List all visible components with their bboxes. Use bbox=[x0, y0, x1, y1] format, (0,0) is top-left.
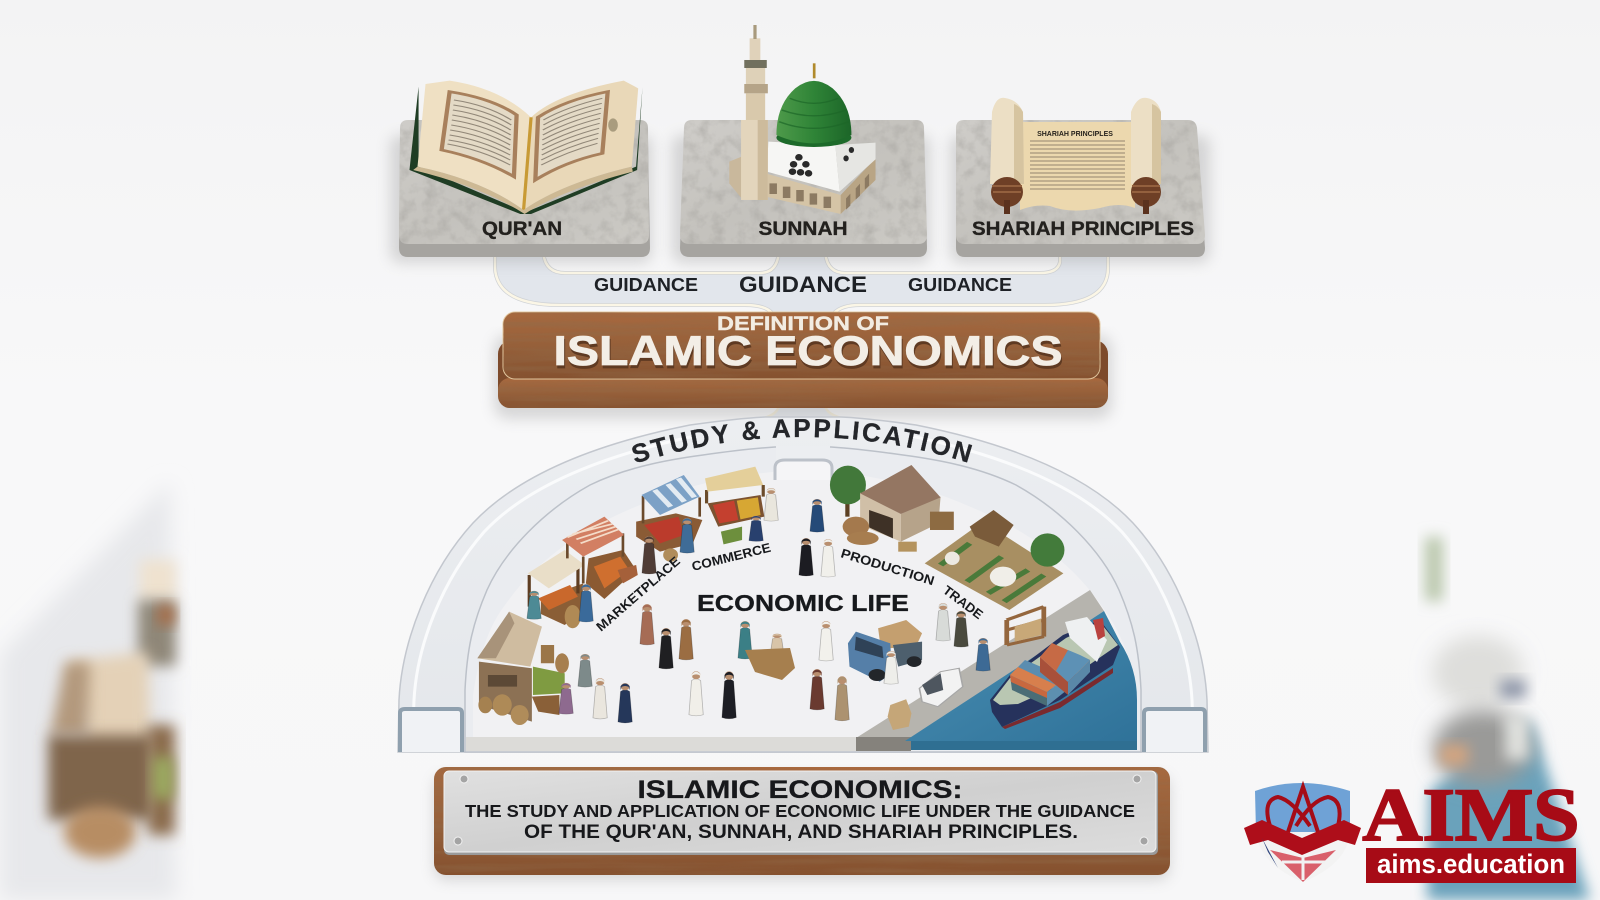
water bbox=[905, 611, 1137, 742]
bracket: right foot bbox=[1144, 709, 1205, 752]
cargo crates bbox=[888, 699, 911, 730]
logo: AIMS education bbox=[1244, 774, 1580, 883]
label: QUR'AN: QUR'AN bbox=[482, 218, 562, 240]
label: MARKETPLACE: MARKETPLACE bbox=[593, 553, 683, 634]
scene: economic life bbox=[477, 465, 1064, 730]
panel: study and application arch bbox=[397, 416, 1209, 753]
icon: parchment scroll bbox=[990, 98, 1161, 214]
scroll heading: SHARIAH PRINCIPLES bbox=[1037, 131, 1113, 138]
heading: STUDY & APPLICATION: STUDY & APPLICATION bbox=[632, 419, 972, 462]
scene: port, quay, water and ship bbox=[856, 590, 1137, 751]
wordmark: AIMS: AIMS bbox=[1362, 774, 1580, 857]
connector tubes: guidance channel bbox=[495, 248, 1108, 313]
van bbox=[919, 668, 963, 707]
label: SUNNAH: SUNNAH bbox=[758, 218, 848, 240]
panel: definition plaque bbox=[434, 767, 1170, 880]
label: left GUIDANCE: GUIDANCE bbox=[594, 274, 698, 295]
label: TRADE: TRADE bbox=[940, 582, 986, 622]
heading: ECONOMIC LIFE: ECONOMIC LIFE bbox=[697, 590, 909, 616]
screws bbox=[454, 775, 1148, 845]
barn bbox=[830, 465, 954, 552]
icon: open Qur'an book bbox=[409, 81, 642, 214]
arch inner zone bbox=[465, 447, 1141, 752]
blurred side panel: left ghost image bbox=[0, 482, 176, 900]
icon: AIMS shield bbox=[1244, 783, 1361, 882]
label: SHARIAH PRINCIPLES: SHARIAH PRINCIPLES bbox=[972, 218, 1194, 240]
panel: Sunnah tile bbox=[672, 25, 930, 263]
storehouse bbox=[477, 612, 569, 725]
panel: Shariah Principles tile bbox=[950, 98, 1210, 263]
farm plot bbox=[925, 510, 1064, 610]
label: COMMERCE: COMMERCE bbox=[690, 540, 773, 574]
plaque definition line 1: THE STUDY AND APPLICATION OF ECONOMIC LIFE UNDER THE GUIDANCE bbox=[465, 801, 1135, 821]
plaque heading: ISLAMIC ECONOMICS: bbox=[638, 776, 962, 804]
connector: sign to arch bbox=[760, 398, 846, 419]
title shadow and text: ISLAMIC ECONOMICS: ISLAMIC ECONOMICS bbox=[554, 327, 1062, 374]
label: right GUIDANCE: GUIDANCE bbox=[908, 274, 1012, 295]
panel: Qur'an tile bbox=[390, 81, 652, 263]
floor edge bbox=[466, 737, 857, 751]
label: centre GUIDANCE: GUIDANCE bbox=[739, 272, 867, 297]
icon: mosque with green dome bbox=[729, 25, 876, 214]
label: PRODUCTION: PRODUCTION bbox=[839, 546, 936, 588]
figures: traders and workers bbox=[527, 488, 990, 723]
title: DEFINITION OF: DEFINITION OF bbox=[717, 313, 889, 335]
title shadow and text: ISLAMIC ECONOMICS: ISLAMIC ECONOMICS bbox=[554, 330, 1064, 377]
marketplace stall: yellow canopy bbox=[705, 467, 764, 544]
arch outer band bbox=[398, 417, 1208, 752]
blurred side panel: right ghost image bbox=[1425, 537, 1590, 900]
marketplace stall: cream canopy bbox=[528, 550, 585, 628]
plaque definition line 2: OF THE QUR'AN, SUNNAH, AND SHARIAH PRINCIPLES. bbox=[524, 822, 1078, 843]
marketplace stall: blue canopy bbox=[636, 475, 702, 562]
wooden frame bbox=[1007, 607, 1044, 645]
arch channel notch bbox=[775, 446, 832, 480]
bracket: left foot bbox=[400, 709, 462, 752]
panel: wooden title sign bbox=[494, 312, 1112, 419]
badge: aims.education: aims.education bbox=[1377, 849, 1565, 879]
quay bbox=[856, 590, 1104, 742]
floor bbox=[473, 470, 1137, 737]
ship bbox=[990, 617, 1120, 729]
truck bbox=[848, 620, 922, 682]
marketplace stall: striped canopy bbox=[562, 517, 638, 599]
